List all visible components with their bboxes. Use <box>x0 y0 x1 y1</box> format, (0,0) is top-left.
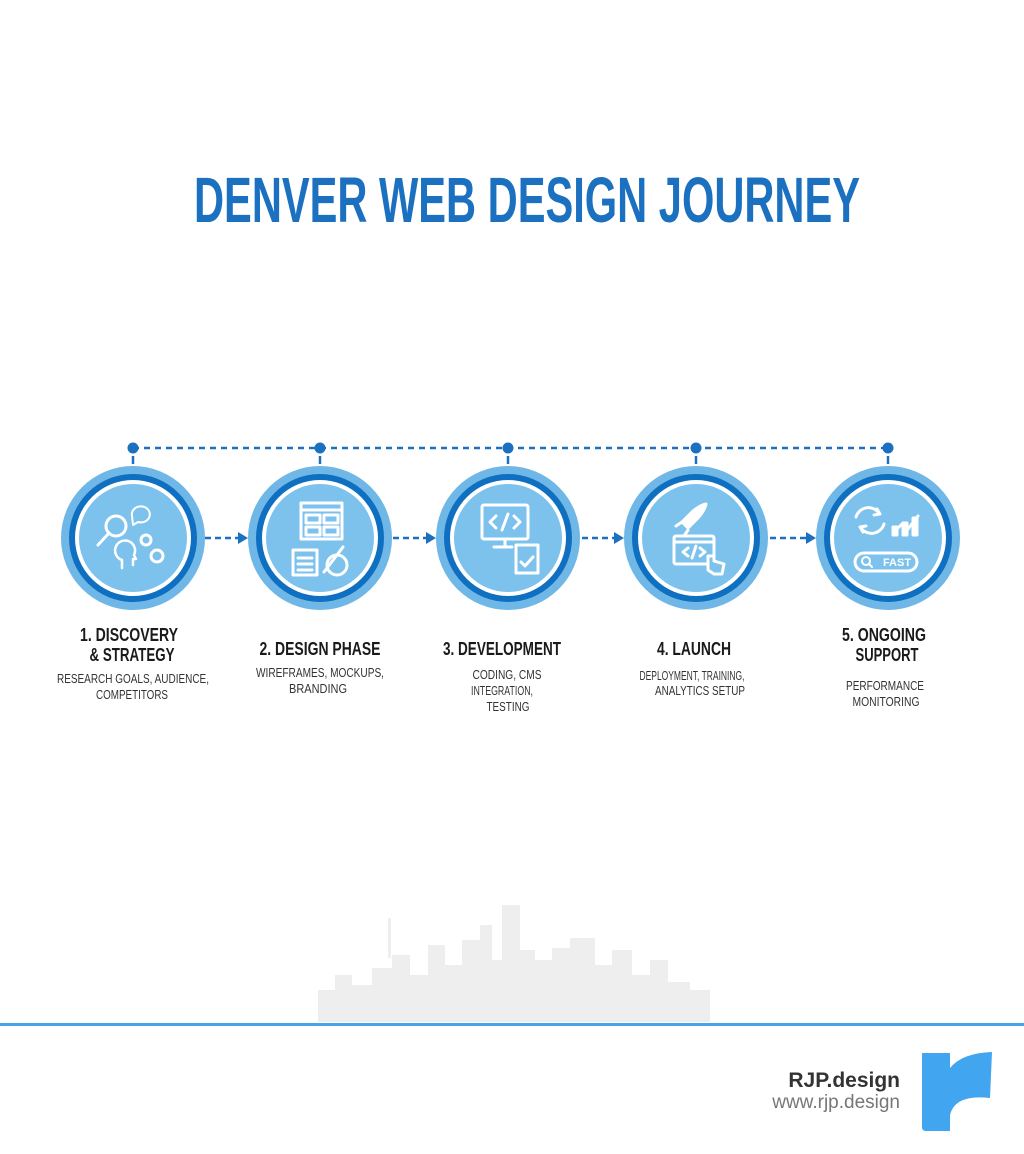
step 1 circle <box>61 466 205 610</box>
label 5 <box>842 625 926 709</box>
step 5 circle <box>816 466 960 610</box>
label 3: CODING, CMS <box>472 667 542 682</box>
label 1: & STRATEGY <box>90 645 174 665</box>
icon: code monitor <box>482 505 538 573</box>
label 1 <box>57 625 209 702</box>
label 1: COMPETITORS <box>96 687 168 702</box>
brand text: www.rjp.design <box>771 1092 900 1113</box>
label 3 <box>443 639 561 714</box>
icon: research <box>98 506 163 568</box>
label 4: ANALYTICS SETUP <box>655 683 745 698</box>
label 3: 3. DEVELOPMENT <box>443 639 561 659</box>
label 2: BRANDING <box>289 681 347 696</box>
arrows between steps <box>205 532 816 544</box>
icon: wireframe <box>293 503 347 575</box>
label 3: INTEGRATION, <box>471 683 533 698</box>
label 4: 4. LAUNCH <box>657 639 731 659</box>
label 5: 5. ONGOING <box>842 625 926 645</box>
icon: monitoring <box>855 508 918 571</box>
icon: rocket launch <box>674 504 724 574</box>
label 5: SUPPORT <box>856 645 919 665</box>
step 5 circle: FAST <box>883 557 911 569</box>
label 2: WIREFRAMES, MOCKUPS, <box>256 665 384 680</box>
label 5: PERFORMANCE <box>846 678 924 693</box>
label 2: 2. DESIGN PHASE <box>260 639 380 659</box>
label 3: TESTING <box>486 699 530 714</box>
label 5: MONITORING <box>852 694 920 709</box>
brand text <box>771 1069 900 1113</box>
logo r <box>922 1052 992 1131</box>
bottom rule <box>0 1023 1024 1026</box>
label 1: 1. DISCOVERY <box>80 625 178 645</box>
label 4: DEPLOYMENT, TRAINING, <box>640 668 744 683</box>
label 1: RESEARCH GOALS, AUDIENCE, <box>57 671 209 686</box>
brand text: RJP.design <box>788 1069 900 1092</box>
label 2 <box>256 639 384 696</box>
skyline <box>318 905 710 1022</box>
timeline connector <box>128 442 894 464</box>
label 4 <box>640 639 745 698</box>
step 3 circle <box>436 466 580 610</box>
step 2 circle <box>248 466 392 610</box>
step 4 circle <box>624 466 768 610</box>
